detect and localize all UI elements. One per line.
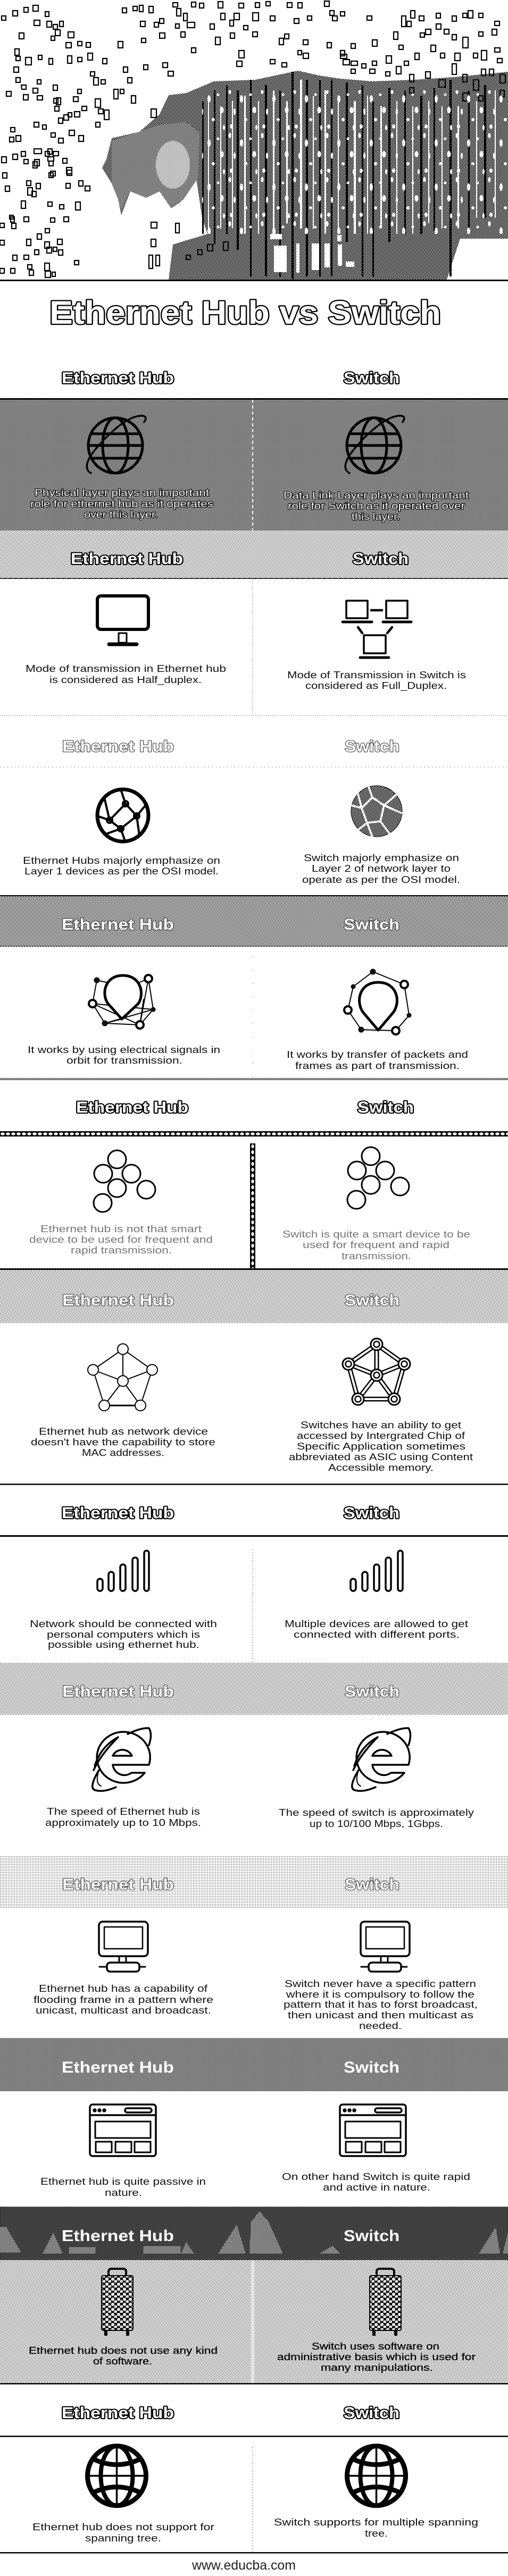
row 6 header: Ethernet Hub	[62, 1292, 174, 1309]
icon: globe hub	[87, 416, 146, 473]
text: switch ASIC	[289, 1419, 473, 1473]
row 5 header	[0, 1099, 508, 1137]
text: hub passive	[40, 2176, 206, 2198]
text: hub physical layer: over this layer.	[84, 509, 158, 520]
text: hub not smart: Ethernet hub is not that smart	[40, 1223, 202, 1234]
panel: row 10 passive vs active	[0, 2038, 508, 2198]
icon: signal bars hub	[97, 1551, 149, 1591]
text: switch smart	[282, 1228, 470, 1261]
row 4 header	[0, 895, 508, 947]
row 11 header with city silhouette: Switch	[344, 2227, 399, 2245]
text: switch data link layer: role for Switch as it operated over	[288, 500, 465, 511]
text: hub passive: nature.	[105, 2187, 142, 2198]
row 6 header	[0, 1268, 508, 1323]
text: layer 2	[302, 852, 460, 885]
icon: desktop switch	[361, 1922, 410, 1972]
text: full duplex	[287, 669, 466, 692]
text: layer 1: Layer 1 devices as per the OSI model.	[24, 865, 219, 877]
panel: row 11 software	[0, 2207, 508, 2385]
text: packets and frames	[287, 1049, 468, 1071]
row 2 header: Switch	[353, 550, 409, 568]
row 1 body background	[0, 400, 508, 531]
text: layer 2: Switch majorly emphasize on	[304, 852, 459, 863]
text: electrical signals: orbit for transmission.	[66, 1055, 182, 1066]
row 10 header: Switch	[344, 2059, 399, 2076]
icon: pin with ring nodes	[344, 969, 411, 1034]
text: packets and frames: frames as part of transmission.	[295, 1060, 460, 1071]
icon: globe switch	[345, 416, 404, 473]
row 2 header: Ethernet Hub	[71, 550, 183, 568]
icon: pentagon network thick	[343, 1338, 410, 1405]
icon: tower hub	[102, 2269, 133, 2336]
text: layer 1	[23, 855, 220, 877]
text: switch speed	[279, 1807, 474, 1829]
text: layer 2: Layer 2 of network layer to	[312, 863, 451, 874]
text: hub MAC addresses: Ethernet hub as network device	[39, 1426, 208, 1437]
text: electrical signals	[28, 1044, 220, 1066]
text: layer 2: operate as per the OSI model.	[302, 874, 460, 885]
hero bottom rule	[0, 280, 508, 281]
text: switch active	[282, 2171, 470, 2193]
row 11 header with city silhouette: Ethernet Hub	[62, 2227, 174, 2245]
text: personal computers	[30, 1618, 217, 1650]
panel: row 9 flooding frames	[0, 1855, 508, 2031]
text: switch smart: Switch is quite a smart device to be	[282, 1228, 470, 1240]
icon: network globe outline	[97, 789, 148, 841]
icon: app window hub	[90, 2104, 156, 2156]
text: no spanning tree: Ethernet hub does not support for	[32, 2521, 214, 2532]
row 4 header: Ethernet Hub	[62, 916, 174, 933]
text: full duplex: Mode of Transmission in Switch is	[287, 669, 466, 680]
text: switch smart: transmission.	[342, 1250, 411, 1261]
row 5 header: Switch	[357, 1099, 414, 1116]
icon: thick globe hub	[87, 2446, 146, 2506]
row 3 header	[0, 738, 508, 767]
row 7 header: Ethernet Hub	[62, 1504, 174, 1522]
text: hub physical layer: Physical layer plays an important	[35, 487, 209, 498]
text: uses software: Switch uses software on	[312, 2341, 439, 2352]
footer url: www.educba.com	[191, 2558, 296, 2573]
text: hub MAC addresses	[31, 1426, 215, 1458]
icon: thick globe switch	[347, 2446, 405, 2506]
row 9 header	[0, 1855, 508, 1908]
text: personal computers: Network should be connected with	[30, 1618, 217, 1629]
row 5 header: Ethernet Hub	[76, 1099, 188, 1116]
text: no specific pattern: pattern that it has to forst broadcast,	[284, 1999, 478, 2010]
panel: row 3 OSI layer	[0, 738, 508, 885]
row 3 header: Ethernet Hub	[62, 738, 174, 755]
panel: row 1 physical vs data link layer	[0, 340, 508, 531]
panel: row 2 transmission mode	[0, 531, 508, 715]
row 10 header: Ethernet Hub	[62, 2059, 174, 2076]
text: flooding: unicast, multicast and broadcast.	[36, 2005, 211, 2016]
row 12 header: Switch	[344, 2404, 399, 2422]
text: full duplex: considered as Full_Duplex.	[305, 680, 447, 692]
text: hub speed: The speed of Ethernet hub is	[47, 1806, 200, 1817]
row 10 header	[0, 2038, 508, 2091]
panel: row 6 MAC addresses	[0, 1268, 508, 1485]
text: different ports: Multiple devices are allowed to get	[285, 1618, 468, 1629]
panel: row 12 spanning tree	[0, 2404, 508, 2554]
row 8 header: Switch	[345, 1683, 399, 1701]
text: switch ASIC: Specific Application sometimes	[297, 1441, 465, 1452]
row 6 header: Switch	[345, 1292, 399, 1309]
text: switch active: and active in nature.	[323, 2182, 430, 2193]
text: half duplex: Mode of transmission in Ethernet hub	[26, 663, 226, 674]
row 4 header: Switch	[344, 916, 399, 933]
row 1 header	[0, 340, 508, 400]
text: switch data link layer	[284, 490, 469, 522]
text: no spanning tree: spanning tree.	[85, 2532, 161, 2544]
text: flooding	[34, 1983, 213, 2016]
text: hub passive: Ethernet hub is quite passive in	[40, 2176, 206, 2187]
text: hub MAC addresses: doesn't have the capability to store	[31, 1436, 215, 1447]
text: layer 1: Ethernet Hubs majorly emphasize on	[23, 855, 220, 866]
row 9 header: Ethernet Hub	[62, 1876, 174, 1893]
text: multiple spanning tree: Switch supports for multiple spanning	[274, 2516, 478, 2528]
icon: e logo hub	[93, 1728, 151, 1791]
text: hub not smart: device to be used for frequent and	[29, 1234, 213, 1245]
text: switch speed: up to 10/100 Mbps, 1Gbps.	[310, 1818, 443, 1829]
text: no specific pattern	[284, 1978, 478, 2031]
text: flooding: flooding frame in a pattern where	[34, 1994, 213, 2005]
text: uses software: many manipulations.	[321, 2362, 433, 2373]
text: no software: Ethernet hub does not use any kind	[29, 2345, 218, 2356]
text: hub not smart	[29, 1223, 213, 1256]
text: half duplex	[26, 663, 226, 686]
icon: monitor	[97, 596, 148, 644]
icon: e logo switch	[352, 1728, 411, 1791]
text: different ports	[285, 1618, 468, 1640]
text: uses software	[277, 2341, 476, 2373]
text: switch data link layer: Data Link Layer plays an important	[284, 490, 469, 501]
text: hub MAC addresses: MAC addresses.	[82, 1447, 164, 1458]
text: multiple spanning tree: tree.	[365, 2528, 388, 2539]
row 12 header: Ethernet Hub	[62, 2404, 174, 2422]
icon: circle cluster hub	[94, 1150, 155, 1212]
text: multiple spanning tree	[274, 2516, 478, 2539]
icon: network globe filled	[351, 786, 402, 837]
vertical chain divider	[250, 1143, 255, 1268]
row 2 header	[0, 531, 508, 579]
text: no specific pattern: needed.	[359, 2020, 402, 2031]
icon: tower switch	[370, 2269, 401, 2336]
text: switch ASIC: Accessible memory.	[328, 1462, 434, 1473]
row 8 header: Ethernet Hub	[62, 1683, 174, 1701]
row 9 header: Switch	[345, 1876, 399, 1893]
row 11 header with city silhouette	[0, 2207, 508, 2260]
text: switch speed: The speed of switch is approximately	[279, 1807, 474, 1818]
text: switch data link layer: this layer.	[352, 511, 400, 522]
text: hub physical layer	[30, 487, 213, 520]
text: hub speed	[45, 1806, 201, 1828]
text: switch active: On other hand Switch is quite rapid	[282, 2171, 470, 2182]
row 11 body background	[0, 2260, 508, 2384]
icon: desktop hub	[99, 1922, 148, 1972]
icon: pentagon network thin	[88, 1344, 157, 1411]
row 4 divider	[252, 957, 253, 1079]
text: switch smart: used for frequent and rapid	[303, 1239, 449, 1250]
text: no software: of software.	[93, 2355, 152, 2367]
text: switch ASIC: accessed by Intergrated Chip of	[297, 1430, 465, 1441]
text: no software	[29, 2345, 218, 2367]
text: personal computers: personal computers which is	[47, 1629, 200, 1640]
text: no specific pattern: where it is compulsory to follow the	[286, 1989, 474, 2000]
icon: app window switch	[340, 2104, 406, 2156]
text: half duplex: is considered as Half_duplex.	[49, 674, 202, 686]
row 2 dividers	[0, 579, 508, 715]
icon: three connected computers	[343, 601, 411, 658]
icon: pin with meshed nodes	[89, 975, 155, 1029]
panel: row 7 connections	[0, 1504, 508, 1663]
row 1 header: Ethernet Hub	[62, 369, 174, 387]
text: no spanning tree	[32, 2521, 214, 2544]
text: hub speed: approximately up to 10 Mbps.	[45, 1817, 201, 1828]
panel: row 5 smart device	[0, 1099, 508, 1268]
panel: row 8 speed	[0, 1663, 508, 1829]
text: personal computers: possible using ethernet hub.	[48, 1639, 199, 1650]
text: no specific pattern: Switch never have a specific pattern	[285, 1978, 476, 1989]
text: hub not smart: rapid transmission.	[71, 1244, 172, 1256]
text: uses software: administrative basis which is used for	[277, 2351, 476, 2362]
hero image: thresholded data-centre photo	[0, 0, 508, 281]
row 1 header: Switch	[344, 369, 399, 387]
row 8 header	[0, 1663, 508, 1715]
text: flooding: Ethernet hub has a capability of	[39, 1983, 208, 1994]
row 7 divider	[252, 1550, 253, 1663]
row 7 header	[0, 1504, 508, 1537]
text: hub physical layer: role for ethernet hub as it operates	[30, 498, 213, 509]
icon: signal bars switch	[351, 1551, 403, 1591]
text: electrical signals: It works by using electrical signals in	[28, 1044, 220, 1055]
text: different ports: connected with different ports.	[294, 1629, 460, 1640]
row 12 divider	[252, 2447, 253, 2553]
panel: row 4 signals vs packets	[0, 895, 508, 1080]
text: packets and frames: It works by transfer of packets and	[287, 1049, 468, 1060]
text: switch ASIC: abbreviated as ASIC using Content	[289, 1451, 473, 1462]
text: switch ASIC: Switches have an ability to get	[301, 1419, 461, 1430]
title: Ethernet Hub vs Switch	[49, 294, 441, 331]
icon: circle cluster switch	[347, 1147, 409, 1209]
row 3 header: Switch	[345, 738, 399, 755]
row 7 header: Switch	[344, 1504, 399, 1522]
text: no specific pattern: then unicast and then multicast as	[288, 2009, 473, 2021]
row 12 header	[0, 2404, 508, 2437]
